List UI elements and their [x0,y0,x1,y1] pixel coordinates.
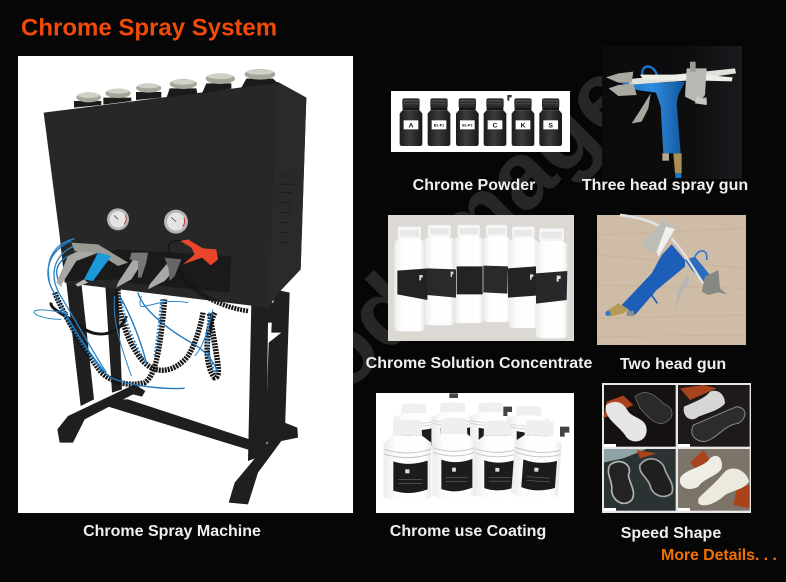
panel: speed shape photo grid [602,383,751,513]
icon: two head gun [605,215,727,317]
title: Chrome Spray System [21,14,277,42]
link: more details: More Details. . . [661,547,777,564]
icon: powder bottles [400,95,562,146]
label: chrome use coating: Chrome use Coating [390,523,546,540]
panel: chrome spray machine photo [18,56,353,513]
icon: spray guns [56,243,181,289]
icon: gun rack [61,249,231,293]
label: chrome powder: Chrome Powder [413,177,535,194]
bottle labels: B1-P2 [462,124,473,128]
icon: stand legs and base [57,283,298,504]
photo: LT-502 [603,385,676,447]
panel: two head gun photo [597,215,746,345]
bottle labels: A [409,122,414,129]
icon: three head gun [606,62,736,178]
icon: tank caps [74,69,278,108]
panel: three head spray gun photo [602,46,742,179]
label: chrome spray machine: Chrome Spray Machine [83,523,261,540]
bottle labels: C [493,122,498,129]
icon: cabinet body [44,82,306,308]
bottle labels: S [548,122,553,129]
icon: pressure gauges [107,208,188,234]
label: two head gun: Two head gun [620,356,726,373]
panel: chrome solution concentrate photo [388,215,574,341]
label: speed shape: Speed Shape [621,525,721,542]
icon: coating bottles [384,393,569,503]
photo: LT-504 [604,449,676,511]
label: chrome solution concentrate: Chrome Solution Concentrate [366,355,592,372]
panel: chrome powder photo [391,91,570,152]
bottle labels [404,120,558,129]
icon: red air blow gun [180,239,218,265]
bottle labels: K [521,122,526,129]
bottle labels: B1-P1 [434,124,444,128]
label: three head spray gun: Three head spray gun [582,177,748,194]
photo: LT-501 [678,385,750,447]
photo: LT-503 [678,449,750,511]
watermark: Prod Image [214,41,655,482]
icon: air hoses [34,239,248,388]
panel: chrome use coating photo [376,393,574,513]
icon: solution bottles [394,225,567,338]
